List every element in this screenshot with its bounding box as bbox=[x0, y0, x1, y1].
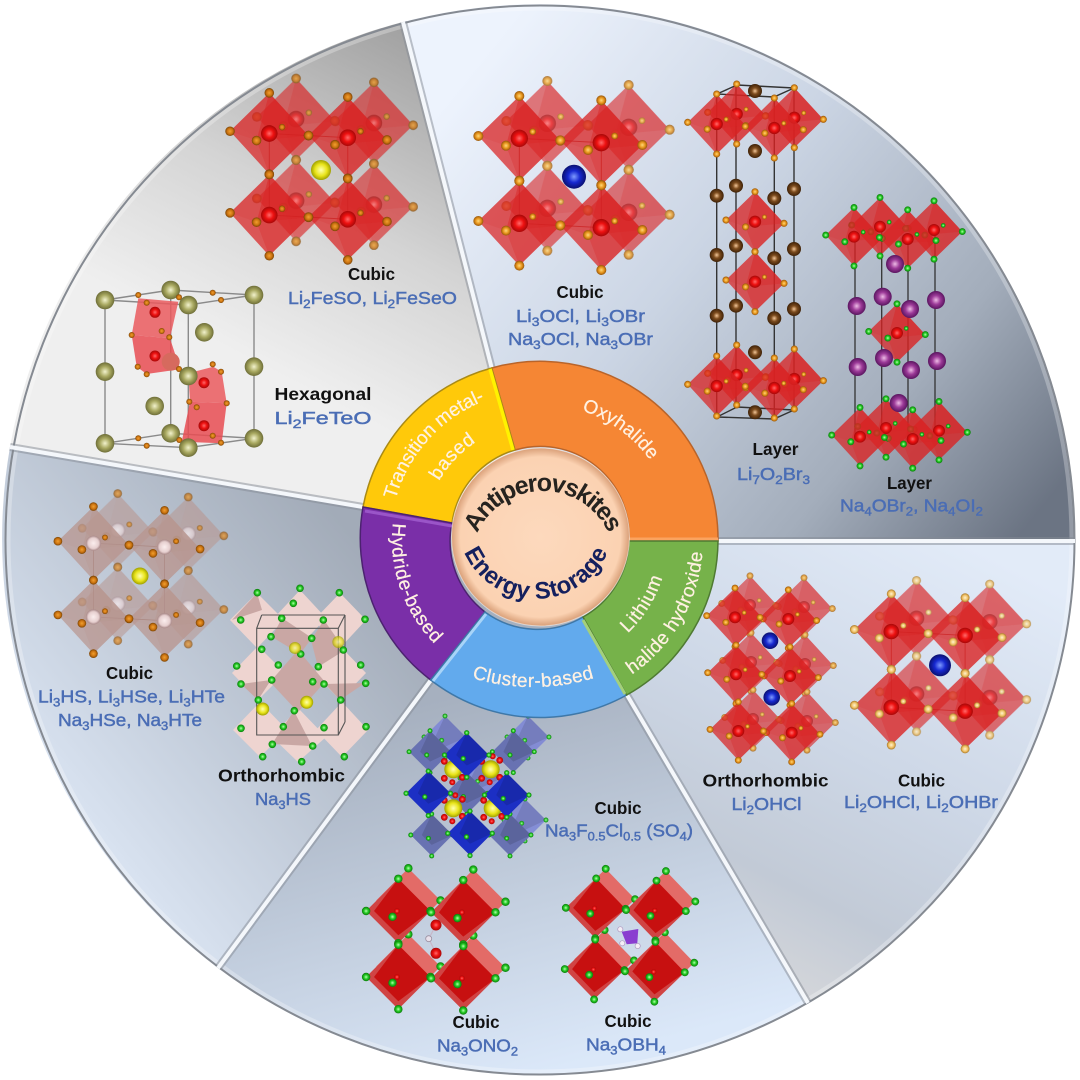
label: cubic Li3OCl bbox=[508, 282, 653, 352]
label: orthorhombic Li2OHCl: 2 bbox=[747, 803, 754, 817]
panel: hydride-based structures bbox=[38, 489, 370, 812]
label: cubic Li3OCl: OCl, Na bbox=[541, 329, 611, 349]
label: cubic Li3OCl: Li bbox=[516, 306, 530, 326]
label: cubic Na3F0.5Cl0.5(SO4) bbox=[545, 798, 693, 844]
label: cubic Na3F0.5Cl0.5(SO4): Cl bbox=[605, 821, 623, 841]
label: cubic Na3ONO2: ONO bbox=[468, 1036, 511, 1056]
label: orthorhombic Na3HS bbox=[218, 766, 345, 812]
panel: cluster-based structures bbox=[362, 714, 700, 1059]
label: cubic Na3ONO2: Na bbox=[437, 1036, 459, 1056]
structure: cubic Na3OBH4 bbox=[560, 864, 700, 1006]
label: orthorhombic Na3HS: 3 bbox=[278, 798, 286, 812]
label: cubic Na3OBH4: Na bbox=[586, 1035, 608, 1055]
label: cubic Li3HS: HTe bbox=[191, 687, 225, 707]
ring segment: lithium halide hydroxide: Lithium bbox=[619, 576, 662, 632]
label: cubic Na3F0.5Cl0.5(SO4): 4 bbox=[680, 830, 687, 844]
label: cubic Na3ONO2: 3 bbox=[461, 1045, 468, 1059]
label: layer Li7O2Br3: O bbox=[760, 464, 775, 484]
structure: cubic Na3F0.5Cl0.5(SO4) bbox=[403, 714, 551, 858]
label: cubic Li3HS: 3 bbox=[82, 719, 90, 733]
ring segment: transition metal-based bbox=[362, 367, 516, 524]
hub title: Energy Storage: Energy Storage bbox=[464, 546, 606, 602]
label: cubic Li3HS: HSe, Na bbox=[89, 710, 161, 730]
label: orthorhombic Li2OHCl: OHCl bbox=[754, 794, 802, 814]
label: layer Na4OBr2: 4 bbox=[948, 505, 956, 519]
label: cubic Na3OBH4: 4 bbox=[659, 1044, 666, 1058]
label: cubic Na3F0.5Cl0.5(SO4): Cubic bbox=[594, 798, 642, 818]
label: cubic Li3HS: Na bbox=[58, 710, 80, 730]
label: layer Na4OBr2 bbox=[840, 473, 983, 519]
ring segment: hydride-based bbox=[360, 506, 486, 681]
structure: orthorhombic Na3HS bbox=[230, 584, 370, 766]
sector: oxyhalide bbox=[403, 4, 1075, 541]
label: cubic Li2OHCl: OHCl, Li bbox=[867, 792, 941, 812]
label: hexagonal Li2FeTeO: 2 bbox=[293, 417, 302, 431]
label: cubic Na3ONO2 bbox=[437, 1012, 518, 1059]
structure: cubic Li3HS bbox=[54, 489, 228, 662]
central ring of categories bbox=[340, 360, 719, 757]
label: cubic Li2OHCl: 2 bbox=[941, 801, 949, 815]
label: cubic Li3HS: Li bbox=[38, 687, 52, 707]
panel: lithium halide hydroxide structures bbox=[702, 572, 1031, 817]
ring segment: oxyhalide: Oxyhalide bbox=[584, 400, 656, 458]
ring segment: lithium halide hydroxide: halide hydroxide bbox=[624, 552, 702, 674]
label: cubic Na3OBH4 bbox=[586, 1011, 666, 1058]
label: layer Li7O2Br3: Li bbox=[737, 464, 751, 484]
label: hexagonal Li2FeTeO bbox=[274, 384, 372, 431]
label: cubic Na3OBH4: Cubic bbox=[604, 1011, 652, 1031]
label: cubic Li3OCl: 3 bbox=[601, 315, 609, 329]
label: layer Na4OBr2: OI bbox=[955, 496, 976, 516]
label: cubic Li3HS: 3 bbox=[53, 696, 61, 710]
label: layer Na4OBr2: OBr bbox=[872, 496, 906, 516]
structure: cubic Na3ONO2 bbox=[362, 864, 510, 1015]
label: orthorhombic Na3HS: Na bbox=[255, 789, 277, 809]
ring segment: cluster-based bbox=[430, 611, 628, 718]
central hub bbox=[451, 448, 630, 626]
label: hexagonal Li2FeTeO: Li bbox=[274, 408, 288, 428]
label: cubic Na3F0.5Cl0.5(SO4): ) bbox=[687, 821, 693, 841]
label: layer Na4OBr2: Layer bbox=[887, 473, 932, 493]
label: cubic Li3OCl: 3 bbox=[611, 338, 618, 352]
label: cubic Na3OBH4: OBH bbox=[618, 1035, 659, 1055]
label: cubic Na3F0.5Cl0.5(SO4): 0.5 bbox=[623, 830, 641, 844]
structure: layered Li7O2Br3 bbox=[684, 80, 827, 422]
label: cubic Li2OHCl: OHBr bbox=[949, 792, 998, 812]
label: cubic Li3HS: Cubic bbox=[106, 663, 153, 683]
label: cubic Li3OCl: OBr bbox=[618, 329, 653, 349]
ring segment: transition metal-based: based bbox=[428, 432, 475, 480]
label: cubic Li3HS: 3 bbox=[161, 719, 169, 733]
structure: layered Na4OBr2 bbox=[822, 194, 971, 472]
label: hexagonal Li2FeTeO: FeTeO bbox=[302, 408, 372, 428]
label: orthorhombic Na3HS: Orthorhombic bbox=[218, 766, 345, 786]
label: cubic Na3F0.5Cl0.5(SO4): (SO bbox=[641, 821, 680, 841]
label: layer Li7O2Br3: Br bbox=[783, 464, 803, 484]
label: cubic Li2OHCl: 2 bbox=[859, 801, 867, 815]
label: cubic Li3OCl: Cubic bbox=[556, 282, 604, 302]
label: cubic Li2FeSO: FeSeO bbox=[395, 288, 457, 308]
label: orthorhombic Li2OHCl: Li bbox=[732, 794, 745, 814]
structure: cubic Li2FeSO bbox=[225, 74, 418, 265]
label: cubic Li3HS: HSe, Li bbox=[120, 687, 183, 707]
structure: hexagonal Li2FeTeO bbox=[96, 281, 263, 457]
label: layer Na4OBr2: 2 bbox=[906, 505, 913, 519]
label: cubic Li3OCl: OBr bbox=[609, 306, 645, 326]
label: cubic Li3HS: 3 bbox=[183, 696, 191, 710]
ring segment: transition metal-based: Transition metal- bbox=[383, 390, 482, 496]
label: cubic Na3F0.5Cl0.5(SO4): F bbox=[576, 821, 588, 841]
label: cubic Li2FeSO bbox=[288, 264, 457, 311]
sector: lithium halide hydroxide bbox=[540, 540, 1075, 1003]
hub title: Antiperovskites: Antiperovskites bbox=[466, 478, 618, 533]
label: layer Na4OBr2: , Na bbox=[913, 496, 948, 516]
label: layer Li7O2Br3: 3 bbox=[802, 473, 810, 487]
label: orthorhombic Li2OHCl: Orthorhombic bbox=[702, 771, 829, 791]
label: cubic Na3ONO2: Cubic bbox=[452, 1012, 500, 1032]
label: cubic Li3OCl: 3 bbox=[533, 338, 541, 352]
label: cubic Na3OBH4: 3 bbox=[610, 1044, 618, 1058]
sector: cluster-based bbox=[218, 540, 808, 1075]
label: layer Na4OBr2: 2 bbox=[976, 505, 983, 519]
panel: oxyhalide structures bbox=[473, 76, 983, 519]
ring segment: hydride-based: Hydride-based bbox=[388, 524, 444, 644]
label: orthorhombic Li2OHCl bbox=[702, 771, 829, 817]
label: cubic Li3OCl: OCl, Li bbox=[539, 306, 601, 326]
label: hexagonal Li2FeTeO: Hexagonal bbox=[274, 384, 372, 404]
label: layer Li7O2Br3 bbox=[737, 439, 810, 487]
label: layer Li7O2Br3: 7 bbox=[752, 473, 760, 487]
label: cubic Li2FeSO: Li bbox=[288, 288, 302, 308]
label: orthorhombic Na3HS: HS bbox=[285, 789, 311, 809]
label: cubic Li2FeSO: 2 bbox=[303, 297, 311, 311]
label: cubic Li2FeSO: FeSO, Li bbox=[311, 288, 388, 308]
ring segment: oxyhalide bbox=[452, 360, 719, 582]
label: cubic Na3F0.5Cl0.5(SO4): 3 bbox=[569, 830, 576, 844]
structure: cubic Li2OHCl bbox=[850, 576, 1031, 753]
label: cubic Li3HS: 3 bbox=[113, 696, 121, 710]
label: cubic Li3HS: HS, Li bbox=[60, 687, 113, 707]
label: cubic Li3OCl: Na bbox=[508, 329, 530, 349]
label: cubic Na3F0.5Cl0.5(SO4): Na bbox=[545, 821, 567, 841]
structure: orthorhombic Li2OHCl bbox=[703, 572, 839, 765]
label: cubic Li3HS bbox=[38, 663, 225, 733]
ring segment: lithium halide hydroxide bbox=[582, 540, 719, 696]
label: cubic Li2FeSO: Cubic bbox=[348, 264, 395, 284]
sector: hydride-based bbox=[2, 447, 540, 968]
structure: cubic Li3OCl bbox=[473, 76, 675, 275]
label: cubic Li2FeSO: 2 bbox=[388, 297, 395, 311]
label: cubic Na3ONO2: 2 bbox=[511, 1045, 518, 1059]
sector: transition metal-based bbox=[10, 22, 540, 540]
label: layer Li7O2Br3: 2 bbox=[775, 473, 783, 487]
panel: transition metal-based structures bbox=[96, 74, 457, 457]
label: layer Li7O2Br3: Layer bbox=[752, 439, 799, 459]
label: layer Na4OBr2: 4 bbox=[864, 505, 872, 519]
label: cubic Na3F0.5Cl0.5(SO4): 0.5 bbox=[588, 830, 606, 844]
label: cubic Li3OCl: 3 bbox=[532, 315, 540, 329]
label: cubic Li2OHCl: Li bbox=[844, 792, 858, 812]
label: cubic Li2OHCl: Cubic bbox=[898, 771, 945, 791]
label: cubic Li2OHCl bbox=[844, 771, 998, 815]
label: cubic Li3HS: HTe bbox=[168, 710, 202, 730]
label: layer Na4OBr2: Na bbox=[840, 496, 862, 516]
ring segment: cluster-based: Cluster-based bbox=[474, 665, 594, 688]
